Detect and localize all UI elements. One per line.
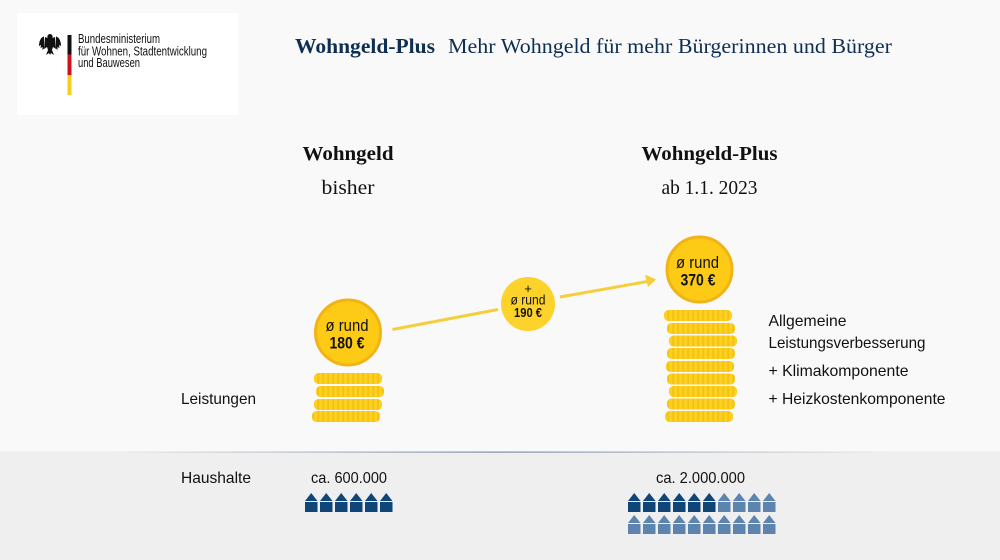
title: Mehr Wohngeld für mehr Bürgerinnen und Bürger — [448, 34, 892, 58]
coin: plus rund 190 euro: ø rund — [510, 292, 546, 308]
panel: household band — [0, 452, 1000, 560]
coin: rund 180 euro: 180 € — [330, 334, 365, 352]
heading: Wohngeld-Plus ab 1.1. 2023 — [642, 143, 778, 199]
coin stack: left — [312, 373, 384, 422]
heading: Wohngeld-Plus ab 1.1. 2023: ab 1.1. 2023 — [662, 177, 758, 199]
icons: households right, top row — [628, 493, 776, 512]
coin: rund 370 euro: 370 € — [680, 270, 716, 290]
ministry name: für Wohnen, Stadtentwicklung — [78, 44, 207, 58]
ministry name: Bundesministerium — [78, 32, 160, 46]
coin stack: right — [664, 310, 737, 422]
value: ca. 600.000: ca. 600.000 — [311, 470, 387, 487]
text block: components: Leistungsverbesserung — [768, 335, 926, 352]
icons: households right, bottom row — [628, 515, 776, 534]
heading: Wohngeld bisher — [302, 143, 394, 199]
value: ca. 2.000.000: ca. 2.000.000 — [656, 470, 745, 487]
coin: rund 370 euro — [667, 237, 732, 302]
coin: plus rund 190 euro: 190 € — [514, 305, 542, 320]
ministry name — [78, 32, 207, 70]
icon: federal eagle — [39, 34, 61, 55]
coin: rund 180 euro: ø rund — [326, 316, 368, 335]
coin: plus rund 190 euro — [501, 277, 555, 331]
text block: components: + Klimakomponente — [768, 363, 909, 380]
heading: Wohngeld-Plus ab 1.1. 2023: Wohngeld-Plus — [642, 143, 778, 165]
arrow: increase, second segment — [560, 274, 656, 297]
label: Haushalte: Haushalte — [181, 470, 251, 487]
coin: rund 180 euro — [316, 300, 380, 365]
text block: components: Allgemeine — [768, 313, 847, 330]
title: Wohngeld-Plus — [295, 34, 435, 58]
icons: households left — [305, 493, 392, 512]
coin: rund 370 euro: ø rund — [676, 253, 719, 272]
ministry name: und Bauwesen — [78, 56, 140, 70]
logo: Bundesministerium — [17, 13, 238, 115]
text block: components — [768, 313, 946, 408]
text block: components: + Heizkostenkomponente — [768, 391, 946, 408]
heading: Wohngeld bisher: bisher — [322, 177, 375, 199]
coin: plus rund 190 euro: + — [524, 281, 532, 296]
heading: Wohngeld bisher: Wohngeld — [302, 143, 394, 165]
flag bar — [68, 35, 72, 95]
arrow: increase, first segment — [392, 310, 498, 330]
label: Leistungen: Leistungen — [181, 391, 256, 408]
